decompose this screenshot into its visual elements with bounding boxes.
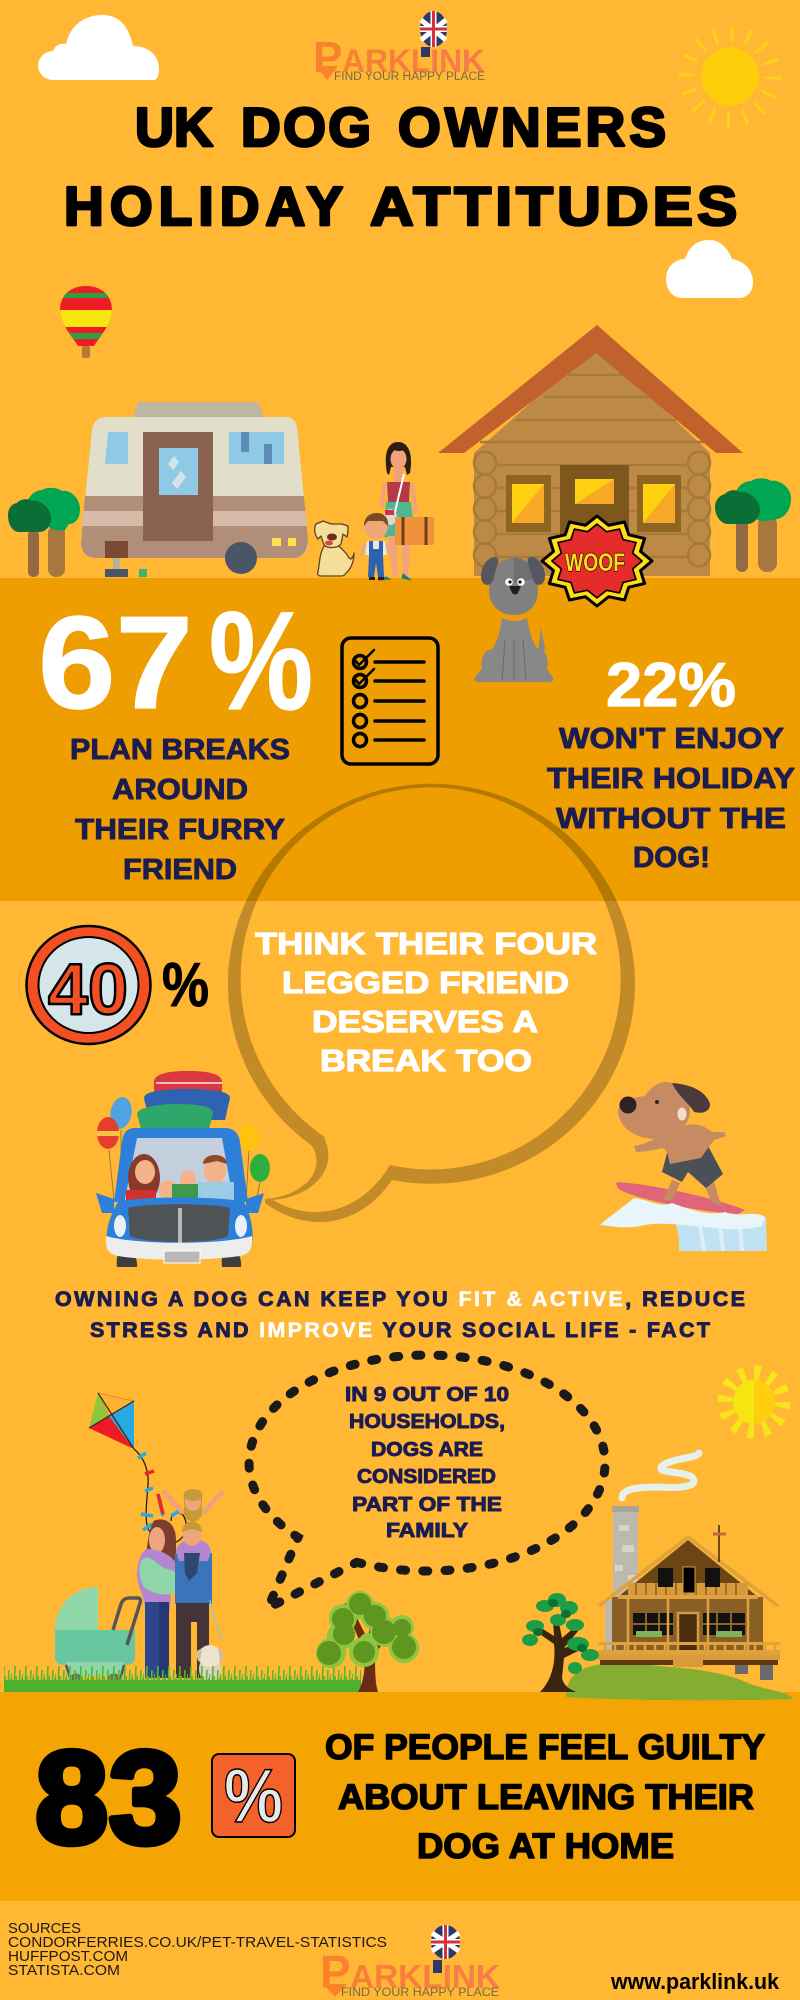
woman with suitcase <box>378 442 434 580</box>
text: in 9 out of 10 households: IN 9 OUT OF 10 <box>345 1384 509 1406</box>
caravan <box>81 402 308 577</box>
illustration: chalet house <box>598 1525 780 1680</box>
text: of people feel guilty: DOG AT HOME <box>417 1827 674 1866</box>
sources <box>8 1920 387 1979</box>
icon: tree <box>316 1591 419 1692</box>
speech bubble outline <box>228 784 635 1222</box>
icon: hot air balloon <box>60 286 112 358</box>
text: plan breaks around their furry friend <box>70 734 290 886</box>
sources: HUFFPOST.COM <box>8 1948 128 1965</box>
text: of people feel guilty <box>325 1728 765 1866</box>
percent sign: % <box>162 951 209 1020</box>
log cabin <box>438 325 743 576</box>
text: in 9 out of 10 households: PART OF THE <box>352 1494 502 1516</box>
grass <box>4 1666 361 1692</box>
sources: CONDORFERRIES.CO.UK/PET-TRAVEL-STATISTICS <box>8 1934 387 1951</box>
text: in 9 out of 10 households: FAMILY <box>386 1520 469 1542</box>
text: in 9 out of 10 households: CONSIDERED <box>357 1466 496 1488</box>
sources: STATISTA.COM <box>8 1962 120 1979</box>
badge: 40: 40 <box>48 950 128 1030</box>
illustration: surfing dog <box>600 1082 767 1251</box>
text: won't enjoy their holiday without the dog: WON'T ENJOY <box>559 723 784 755</box>
logo: Parklink <box>313 11 485 83</box>
trees: right <box>715 478 791 572</box>
icon: union flag balloon <box>420 11 447 57</box>
text: plan breaks around their furry friend: PLAN BREAKS <box>70 734 290 766</box>
text: won't enjoy their holiday without the dog: WITHOUT THE <box>556 803 786 835</box>
icon: union flag balloon <box>431 1925 460 1973</box>
title: UK <box>135 96 213 158</box>
smoke <box>622 1453 699 1498</box>
stat: 83: 83 <box>35 1724 182 1871</box>
hill <box>566 1663 793 1700</box>
stat: 67%: % <box>209 582 313 739</box>
icon: small yellow dog <box>315 521 354 576</box>
illustration: family car with luggage and balloons <box>96 1071 270 1267</box>
text: think their four legged friend deserves a break too: THINK THEIR FOUR <box>255 926 597 961</box>
stat: 22%: 22% <box>606 651 736 720</box>
boy <box>361 513 391 580</box>
text: won't enjoy their holiday without the dog <box>547 723 795 874</box>
logo tagline: FIND YOUR HAPPY PLACE <box>334 71 485 83</box>
website: www.parklink.uk <box>610 1969 780 1994</box>
logo wordmark: ARKLINK <box>350 1958 500 1995</box>
text: plan breaks around their furry friend: THEIR FURRY <box>75 814 285 846</box>
logo: Parklink footer <box>320 1925 500 1999</box>
icon: pram <box>55 1587 140 1686</box>
text: think their four legged friend deserves a break too: BREAK TOO <box>320 1043 532 1078</box>
title: DOG <box>241 96 371 158</box>
text: in 9 out of 10 households <box>345 1384 509 1542</box>
text: plan breaks around their furry friend: FRIEND <box>123 854 237 886</box>
title: ATTITUDES <box>370 176 737 237</box>
dotted speech bubble <box>249 1355 605 1608</box>
text: of people feel guilty: OF PEOPLE FEEL GUILTY <box>325 1728 765 1767</box>
trees: left <box>8 488 80 577</box>
chimney <box>605 1506 639 1655</box>
band: 83% stat <box>0 1692 800 1901</box>
text: think their four legged friend deserves a break too: LEGGED FRIEND <box>282 965 569 1000</box>
logo pin tail <box>323 1984 347 1997</box>
logo tagline: FIND YOUR HAPPY PLACE <box>341 1985 499 1999</box>
icon: green tree by house <box>522 1593 599 1692</box>
text: won't enjoy their holiday without the dog: DOG! <box>633 842 710 874</box>
icon: percent box: % <box>224 1754 283 1839</box>
icon: grey dog <box>474 557 553 682</box>
stat: 67%: 67 <box>38 589 193 736</box>
icon: checklist <box>342 638 438 764</box>
badge: 40 <box>26 926 150 1044</box>
icon: kite <box>89 1393 186 1543</box>
cloud: top right <box>666 240 753 298</box>
text: in 9 out of 10 households: HOUSEHOLDS, <box>349 1411 505 1433</box>
logo pin tail <box>316 66 338 80</box>
icon: sun <box>687 34 773 120</box>
title: OWNERS <box>398 96 666 158</box>
suitcase <box>395 517 434 545</box>
icon: woof burst: WOOF <box>565 549 625 577</box>
title <box>64 96 737 237</box>
text: plan breaks around their furry friend: AROUND <box>112 774 248 806</box>
text: of people feel guilty: ABOUT LEAVING THEIR <box>338 1778 754 1817</box>
logo wordmark: ARKLINK <box>342 43 485 79</box>
title: HOLIDAY <box>64 175 343 237</box>
sources: SOURCES <box>8 1920 81 1937</box>
logo wordmark: P <box>320 1946 351 1998</box>
text: think their four legged friend deserves a break too: DESERVES A <box>312 1004 538 1039</box>
band: 67% and 22% stats <box>0 578 800 901</box>
text: owning a dog fact <box>55 1287 745 1342</box>
logo wordmark: P <box>313 33 342 82</box>
text: owning a dog fact: OWNING A DOG CAN KEEP YOU FIT & ACTIVE, REDUCE <box>55 1287 745 1311</box>
icon: woof burst <box>542 516 652 606</box>
stat: 67% <box>38 582 313 739</box>
icon: sun small <box>725 1373 783 1431</box>
cloud: top left <box>38 15 159 80</box>
text: think their four legged friend deserves a break too <box>255 926 597 1078</box>
text: in 9 out of 10 households: DOGS ARE <box>371 1439 483 1461</box>
illustration: family <box>137 1489 223 1678</box>
icon: white puppy <box>197 1645 223 1683</box>
text: won't enjoy their holiday without the dog: THEIR HOLIDAY <box>547 763 795 795</box>
text: owning a dog fact: STRESS AND IMPROVE YOUR SOCIAL LIFE - FACT <box>90 1318 710 1342</box>
